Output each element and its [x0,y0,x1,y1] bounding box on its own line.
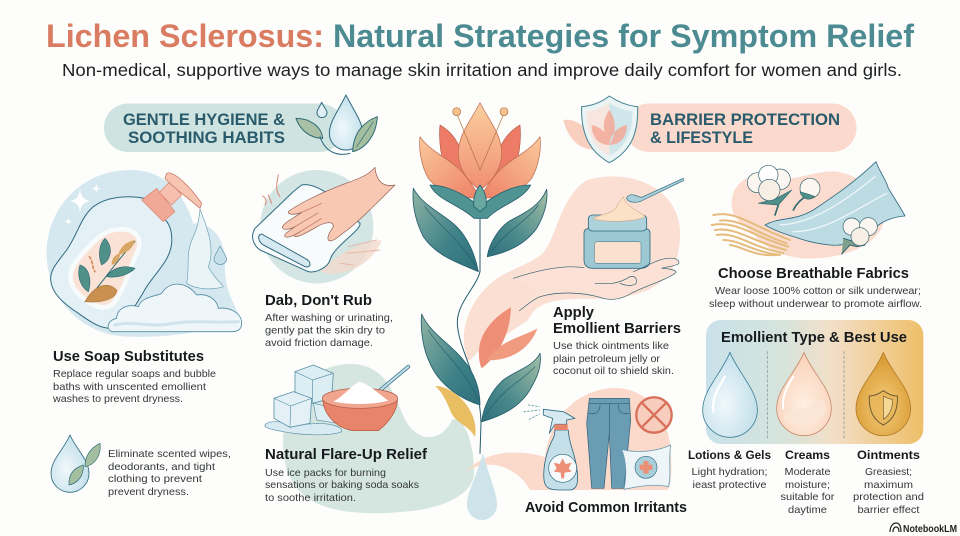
illustrations left column [47,95,408,492]
icon: irritants group [524,397,672,490]
gold accent swoosh [435,386,476,437]
pale blue drop at stem base [467,453,497,520]
block: apply emollient barriers: Use thick ointments like [553,340,669,352]
column: creams: moisture; [785,479,830,491]
column: lotions and gels [688,448,771,491]
block: use soap substitutes [52,348,216,405]
icon: water drop with leaf [51,435,100,492]
peach wave behind hand [464,176,680,361]
block: natural flare-up relief [265,446,428,504]
block: choose breathable fabrics: Wear loose 100% cotton or silk underwear; [715,285,921,297]
column: ointments [853,448,924,516]
column: creams: daytime [788,504,827,516]
heading: avoid common irritants: Avoid Common Irritants [525,499,687,516]
block: apply emollient barriers: coconut oil to shield skin. [553,365,674,377]
block: dab, don't rub: avoid friction damage. [265,337,373,349]
block: use soap substitutes: Replace regular soaps and bubble [53,368,216,380]
column: ointments: Greasiest; [865,466,912,478]
icon: flower plant stem [413,103,547,453]
block: dab, don't rub: After washing or urinating, [265,312,393,324]
header text: BARRIER PROTECTION [650,111,840,129]
section header: gentle hygiene [104,104,344,152]
icon: ice cubes and baking soda bowl [265,365,408,435]
block: apply emollient barriers: plain petroleum jelly or [553,353,661,365]
block: natural flare-up relief: Use ice packs for burning [265,467,386,479]
block: use soap substitutes: Use Soap Substitutes [53,348,204,365]
block: choose breathable fabrics [709,265,922,310]
icon: lotion drop [703,352,757,437]
block: eliminate scented products [108,448,231,498]
icon: soap pump bottle [47,170,242,337]
block: natural flare-up relief: to soothe irritation. [265,492,356,504]
column: creams: Moderate [784,466,831,478]
column: creams [780,448,835,516]
mint background blob: flare-up relief [283,364,474,513]
column: lotions and gels: Light hydration; [692,466,768,478]
section header: barrier protection: & LIFESTYLE [650,129,753,147]
icon: cotton and fabric [712,162,905,258]
centre and right illustrations [413,103,683,490]
icon: water drop with leaves [296,95,377,154]
block: natural flare-up relief: sensations or baking soda soaks [265,479,419,491]
block: dab, don't rub: gently pat the skin dry to [265,324,385,336]
title: Lichen Sclerosus: Natural Strategies for Symptom Relief [46,18,914,54]
section header: barrier protection [625,104,856,152]
column: creams: suitable for [780,491,835,503]
header text: GENTLE HYGIENE & [123,111,285,129]
section header: gentle hygiene: SOOTHING HABITS [128,129,285,147]
block: use soap substitutes: washes to prevent dryness. [52,393,183,405]
column: ointments: protection and [853,491,924,503]
icon: jar on open hand [513,178,683,311]
block: apply emollient barriers [553,304,681,377]
icon: hand dabbing towel [253,167,395,283]
block: choose breathable fabrics: Choose Breathable Fabrics [718,265,909,282]
block: apply emollient barriers: Emollient Barriers [553,320,681,337]
block: eliminate scented products: prevent dryness. [108,486,189,498]
heading: emollient type and best use: Emollient Type & Best Use [721,329,907,346]
block: dab, don't rub: Dab, Don't Rub [265,292,372,309]
block: eliminate scented products: deodorants, and tight [108,461,215,473]
block: choose breathable fabrics: sleep without underwear to promote airflow. [709,298,922,310]
block: natural flare-up relief: Natural Flare-Up Relief [265,446,428,463]
header pill [625,104,856,152]
block: dab, don't rub [265,292,393,349]
header pill [104,104,344,152]
column: ointments: maximum [864,479,913,491]
peach blob and tail behind irritants [466,388,671,490]
block: eliminate scented products: clothing to prevent [108,473,202,485]
column: lotions and gels: Lotions & Gels [688,448,771,462]
icon: shield with lotus [563,96,638,163]
emollient panel background [706,320,923,444]
icon: ointment drop with shield [856,352,911,436]
column: ointments: barrier effect [858,504,920,516]
block: apply emollient barriers: Apply [553,304,595,321]
subtitle: Non-medical, supportive ways to manage skin irritation and improve daily comfort for women and girls. [62,60,902,80]
column: creams: Creams [785,448,830,462]
column: lotions and gels: ieast protective [692,479,767,491]
column: ointments: Ointments [857,448,920,462]
block: eliminate scented products: Eliminate scented wipes, [108,448,231,460]
icon: cream drop [777,352,831,436]
right illustrations [703,162,923,444]
block: use soap substitutes: baths with unscented emollient [53,381,206,393]
